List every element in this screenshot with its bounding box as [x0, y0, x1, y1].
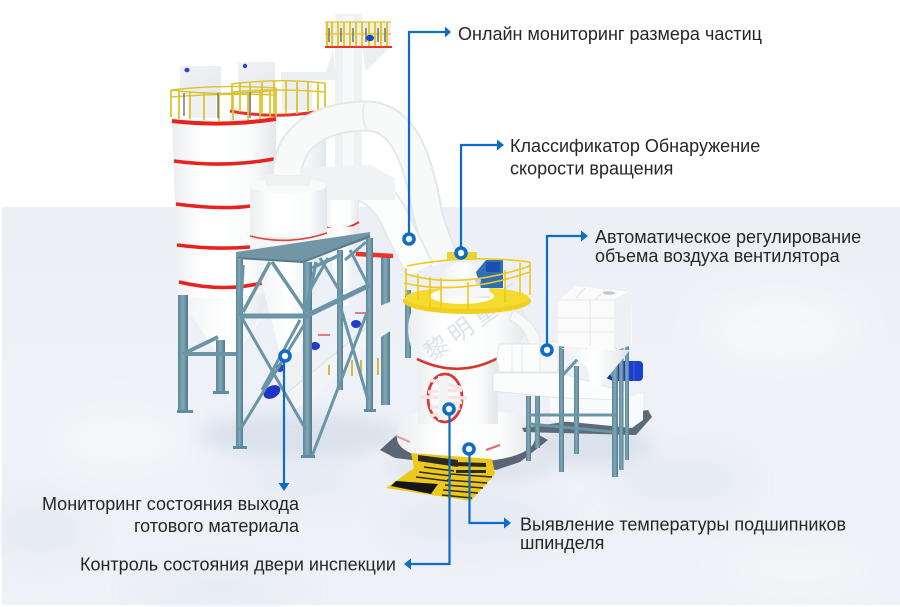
- classifier and yellow platform: [403, 252, 531, 314]
- cyclone steel support frame: [233, 232, 376, 458]
- mill cylinder: [418, 358, 498, 424]
- blue classifier motor: [475, 260, 503, 288]
- callout: fan air volume regulation: объема воздуха вентилятора: [595, 246, 841, 266]
- floor background: [0, 207, 900, 605]
- rear silo railing: [231, 81, 325, 114]
- callout: classifier speed detection: скорости вращения: [510, 158, 673, 178]
- rear silo bag filter box: [238, 62, 275, 94]
- callout: finished product output monitoring: [42, 351, 300, 536]
- callout: finished product output monitoring: готового материала: [134, 516, 300, 536]
- main air intake duct: [497, 310, 558, 372]
- callout: particle size monitoring: [404, 24, 762, 244]
- callout: spindle bearing temperature: Выявление температуры подшипников: [520, 514, 846, 534]
- platform railing: [404, 259, 530, 310]
- dust collector conveyor: [493, 373, 652, 435]
- watermark: 黎明重工: [416, 269, 533, 368]
- mill bulb housing: [408, 305, 526, 368]
- dust collector box: [558, 286, 632, 351]
- rear silo: [230, 62, 326, 223]
- callout: finished product output monitoring: Мониторинг состояния выхода: [42, 494, 300, 514]
- yellow rear railing at column: [329, 358, 378, 380]
- support column behind: [381, 255, 411, 405]
- dark mill foundation: [380, 430, 548, 470]
- red grinding door frame: [428, 374, 462, 422]
- callout: spindle bearing temperature: шпинделя: [520, 533, 604, 553]
- discharge conveyor and motors: [261, 302, 392, 410]
- callout: particle size monitoring: Онлайн мониторинг размера частиц: [458, 24, 762, 44]
- dust collector legs: [526, 330, 629, 477]
- callout: classifier speed detection: [456, 136, 760, 258]
- callout: inspection door monitoring: Контроль состояния двери инспекции: [80, 554, 396, 574]
- industrial mill plant illustration: [171, 14, 652, 501]
- elevator top platform railing: [325, 22, 392, 48]
- primary cyclone: [250, 175, 327, 390]
- upper and lower air ducts: [287, 116, 445, 270]
- mill base: [397, 410, 535, 462]
- secondary cyclone: [300, 165, 395, 306]
- callout: classifier speed detection: Классификатор Обнаружение: [510, 136, 760, 156]
- callout: fan air volume regulation: Автоматическое регулирование: [595, 227, 861, 247]
- front silo railing: [171, 86, 276, 121]
- bucket elevator tower: [281, 14, 392, 184]
- front silo legs: [178, 295, 225, 412]
- dust collector hopper: [562, 348, 630, 386]
- callout: inspection door monitoring: [80, 404, 454, 574]
- front silo bag filter box: [180, 66, 221, 94]
- yellow feed grate: [386, 453, 495, 501]
- callout: fan air volume regulation: [542, 227, 861, 355]
- rear motor: [604, 361, 643, 381]
- callout: spindle bearing temperature: [464, 444, 846, 553]
- front silo: [171, 66, 276, 413]
- grinding mill main body: [396, 269, 535, 462]
- floor shadows: [200, 413, 650, 480]
